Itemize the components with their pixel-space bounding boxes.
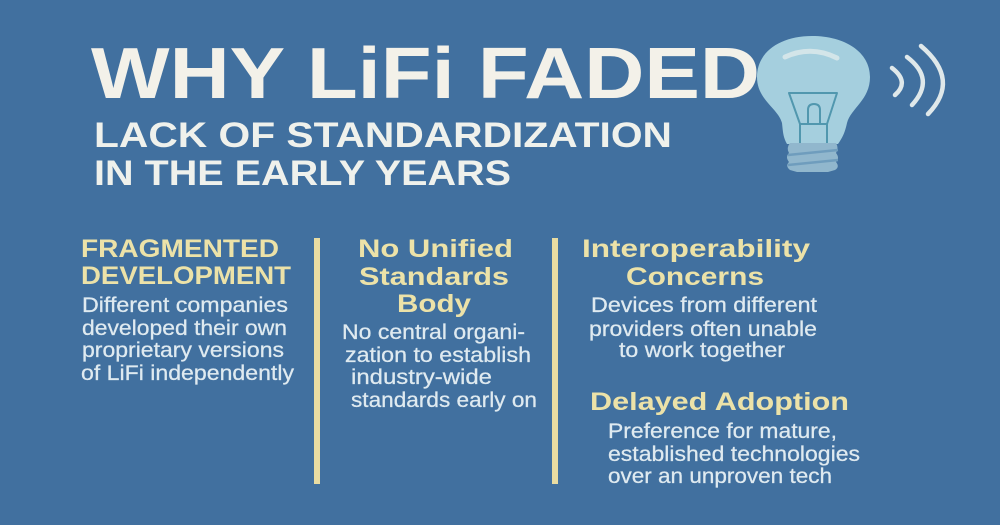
text: no unified standards body description: zation to establish <box>345 344 531 367</box>
panel: fragmented development <box>81 235 295 385</box>
panel: delayed adoption <box>590 388 860 488</box>
text: no unified standards body description: standards early on <box>351 389 537 412</box>
text: no unified standards body description: industry-wide <box>351 366 492 389</box>
text: fragmented development description: proprietary versions <box>82 339 284 362</box>
heading: interoperability concerns: Concerns <box>626 263 764 291</box>
text: delayed adoption description: over an unproven tech <box>608 465 832 488</box>
text: fragmented development description <box>81 294 295 385</box>
panel: interoperability concerns <box>582 235 817 362</box>
title: WHY LiFi FADED <box>91 33 760 114</box>
heading: no unified standards body: Standards <box>359 263 509 291</box>
text: fragmented development description: Different companies <box>82 294 288 317</box>
subtitle: LACK OF STANDARDIZATION <box>94 116 672 155</box>
icon: light bulb <box>757 36 870 172</box>
divider left <box>314 238 320 484</box>
panel: no unified standards body <box>342 235 537 412</box>
text: delayed adoption description <box>608 420 860 488</box>
text: fragmented development description: developed their own <box>82 317 287 340</box>
heading: fragmented development <box>81 235 291 290</box>
heading: no unified standards body: Body <box>397 290 471 318</box>
subtitle: IN THE EARLY YEARS <box>94 154 511 193</box>
heading: interoperability concerns <box>582 235 810 291</box>
text: interoperability concerns description <box>589 294 817 362</box>
text: no unified standards body description <box>342 321 537 412</box>
text: interoperability concerns description: to work together <box>619 339 785 362</box>
text: interoperability concerns description: Devices from different <box>591 294 817 317</box>
text: interoperability concerns description: providers often unable <box>589 318 817 341</box>
heading: no unified standards body: No Unified <box>358 235 513 263</box>
heading: no unified standards body <box>358 235 513 318</box>
icon: signal waves <box>892 46 943 114</box>
heading: interoperability concerns: Interoperability <box>582 235 810 263</box>
heading: delayed adoption: Delayed Adoption <box>590 388 849 416</box>
text: delayed adoption description: Preference for mature, <box>608 420 837 443</box>
text: no unified standards body description: No central organi- <box>342 321 525 344</box>
text: fragmented development description: of LiFi independently <box>81 362 295 385</box>
heading: fragmented development: DEVELOPMENT <box>81 262 291 290</box>
subtitle <box>94 116 672 193</box>
heading: fragmented development: FRAGMENTED <box>81 235 279 263</box>
text: delayed adoption description: established technologies <box>608 443 860 466</box>
divider right <box>552 238 558 484</box>
